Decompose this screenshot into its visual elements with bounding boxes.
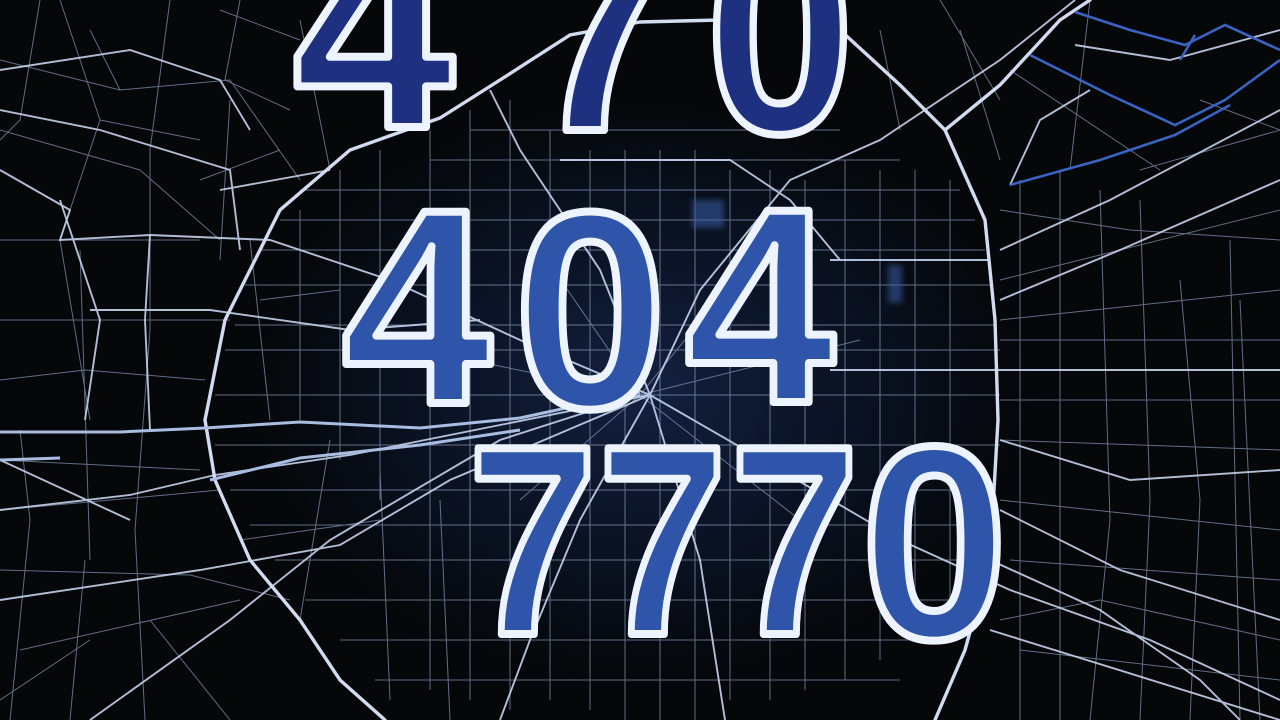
number: 404: 0	[514, 153, 667, 467]
number: 7770: 7	[730, 391, 859, 692]
ring road and arterial highways	[205, 0, 1090, 720]
central glow	[200, 60, 1080, 720]
number: 7770	[468, 390, 1008, 697]
number: 404: 4	[685, 151, 837, 462]
blue waterways top right	[1010, 12, 1280, 185]
number: 404: 4	[342, 152, 494, 463]
number: 404	[342, 151, 837, 467]
pale blue blocks near centre	[692, 200, 902, 303]
river running east to west	[0, 392, 640, 480]
number: 7770: 7	[468, 391, 597, 692]
number: 7770: 7	[598, 391, 727, 692]
number: 7770: 0	[861, 390, 1008, 697]
number: 470 (cropped at top)	[293, 0, 854, 194]
